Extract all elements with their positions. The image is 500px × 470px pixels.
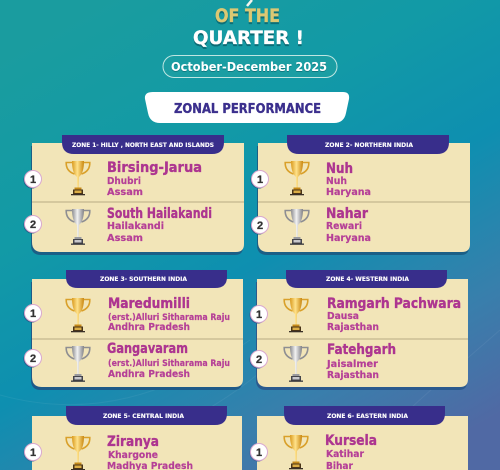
rank 1: 1 xyxy=(30,447,36,459)
heading: zonal performance: ZONAL PERFORMANCE xyxy=(174,102,321,117)
heading: zonal performance xyxy=(145,92,349,123)
winner xyxy=(327,296,461,333)
silver trophy xyxy=(66,209,90,245)
runner-up: Nahar xyxy=(326,206,368,222)
panel: zone 6 xyxy=(250,406,468,470)
rank 1 xyxy=(24,444,42,462)
runner-up: Rajasthan xyxy=(327,370,379,381)
silver trophy xyxy=(284,346,308,382)
winner: Nuh xyxy=(326,161,353,177)
winner xyxy=(325,433,377,470)
runner-up xyxy=(107,206,212,244)
panel: zone 1 xyxy=(24,135,244,255)
rank 2: 2 xyxy=(257,220,263,232)
runner-up xyxy=(326,206,371,244)
winner: Dhubri xyxy=(107,176,141,187)
runner-up: Gangavaram xyxy=(107,341,188,357)
runner-up: Fatehgarh xyxy=(327,342,396,358)
date pill: October-December 2025 xyxy=(171,61,327,75)
runner-up: Assam xyxy=(107,233,143,244)
runner-up: (erst.)Alluri Sitharama Raju xyxy=(108,359,230,369)
date pill: October-December 2025 xyxy=(171,60,327,74)
title xyxy=(193,0,304,51)
rank 2: 2 xyxy=(30,353,36,365)
runner-up xyxy=(107,341,230,380)
title: QUARTER ! xyxy=(193,27,304,49)
runner-up: Hailakandi xyxy=(107,221,164,232)
panel: zone 4 xyxy=(250,270,468,390)
runner-up: South Hailakandi xyxy=(107,206,212,222)
panel: zone 2 xyxy=(250,135,470,255)
winner: Khargone xyxy=(108,450,158,461)
panel: zone 5 xyxy=(24,406,242,470)
title: QUARTER ! xyxy=(193,29,304,51)
rank 1: 1 xyxy=(257,174,263,186)
gold trophy xyxy=(285,161,309,195)
gold trophy xyxy=(66,298,90,332)
winner: Assam xyxy=(107,187,143,198)
rank 1 xyxy=(250,170,268,188)
runner-up: Jaisalmer xyxy=(326,359,378,370)
rank 1: 1 xyxy=(30,308,36,320)
rank 1 xyxy=(24,170,42,188)
runner-up: Rewari xyxy=(326,221,362,232)
rank 2: 2 xyxy=(30,219,36,231)
winner: Nuh xyxy=(326,176,347,187)
zone 2 tab xyxy=(287,135,449,154)
winner: Ramgarh Pachwara xyxy=(327,296,461,312)
zone 4 tab: ZONE 4- WESTERN INDIA xyxy=(326,276,409,283)
zone 1 tab: ZONE 1- HILLY , NORTH EAST AND ISLANDS xyxy=(72,142,214,149)
rank 1: 1 xyxy=(30,174,36,186)
winner: Katihar xyxy=(326,449,364,460)
winner xyxy=(108,296,230,333)
winner: Kursela xyxy=(325,433,377,449)
winner: Dausa xyxy=(327,311,359,322)
zone 3 tab: ZONE 3- SOUTHERN INDIA xyxy=(100,276,187,283)
date pill xyxy=(163,56,337,78)
rank 2 xyxy=(250,350,268,368)
gold trophy xyxy=(284,298,308,332)
winner xyxy=(107,160,202,198)
rank 1: 1 xyxy=(256,309,262,321)
silver trophy xyxy=(285,209,309,245)
rank 1 xyxy=(24,304,42,322)
winner: Ziranya xyxy=(107,434,159,450)
winner: (erst.)Alluri Sitharama Raju xyxy=(108,313,230,323)
rank 2 xyxy=(24,216,42,234)
zone 6 tab: ZONE 6- EASTERN INDIA xyxy=(327,413,408,420)
winner: Birsing-Jarua xyxy=(107,160,202,176)
rank 2 xyxy=(24,350,42,368)
gold trophy xyxy=(66,161,90,195)
silver trophy xyxy=(66,346,90,382)
winner xyxy=(326,161,371,198)
zone 4 tab xyxy=(286,270,447,288)
zone 5 tab: ZONE 5- CENTRAL INDIA xyxy=(103,413,184,420)
rank 1: 1 xyxy=(256,447,262,459)
runner-up: Haryana xyxy=(326,233,371,244)
zone 6 tab xyxy=(284,406,445,425)
winner: Haryana xyxy=(326,187,371,198)
title: OF THE xyxy=(215,5,280,27)
winner: Andhra Pradesh xyxy=(108,322,190,333)
winner: Maredumilli xyxy=(108,296,190,312)
zone 5 tab xyxy=(66,406,227,425)
gold trophy xyxy=(284,435,308,469)
zone 3 tab xyxy=(66,270,227,288)
runner-up: Andhra Pradesh xyxy=(108,369,190,380)
winner xyxy=(107,434,193,470)
rank 2: 2 xyxy=(256,354,262,366)
panel: zone 3 xyxy=(24,270,243,390)
rank 1 xyxy=(250,444,268,462)
rank 1 xyxy=(250,306,268,324)
zone 2 tab: ZONE 2- NORTHERN INDIA xyxy=(325,142,413,149)
gold trophy xyxy=(66,436,90,470)
runner-up xyxy=(326,342,396,381)
winner: Rajasthan xyxy=(327,322,379,333)
title: OF THE xyxy=(215,7,280,29)
zone 1 tab xyxy=(62,135,224,154)
rank 2 xyxy=(250,216,268,234)
